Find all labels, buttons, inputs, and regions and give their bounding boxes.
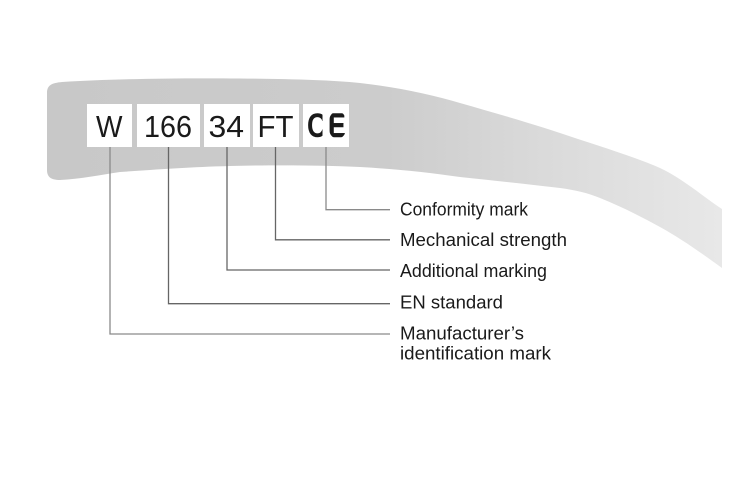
label: manufacturer's identification mark: identification mark [400, 344, 552, 364]
box: W [87, 104, 132, 147]
box: 166: 166 [144, 109, 192, 144]
box: CE conformity symbol: E [328, 107, 346, 145]
label: manufacturer's identification mark: Manufacturer’s [400, 324, 524, 344]
box: CE conformity symbol [303, 104, 349, 147]
leader: additional marking [227, 147, 390, 270]
label: manufacturer's identification mark [400, 324, 552, 364]
leader: EN standard [168, 147, 390, 304]
leader: conformity mark [326, 147, 390, 210]
label: additional marking: Additional marking [400, 261, 547, 281]
leader lines [110, 147, 390, 334]
box: 34: 34 [208, 109, 244, 144]
marking code boxes [87, 104, 349, 147]
leader labels [400, 200, 567, 364]
leader: manufacturer's identification mark [110, 147, 390, 334]
box: FT [253, 104, 299, 147]
diagram: marking on a safety glasses arm [47, 78, 722, 360]
label: mechanical strength: Mechanical strength [400, 230, 567, 250]
glasses arm [47, 78, 722, 268]
box: FT: FT [258, 109, 294, 144]
box: CE conformity symbol: C [307, 106, 327, 145]
box: W: W [96, 109, 123, 144]
label: conformity mark: Conformity mark [400, 200, 529, 220]
box: 166 [137, 104, 200, 147]
leader: mechanical strength [276, 147, 390, 240]
box: 34 [204, 104, 250, 147]
label: EN standard: EN standard [400, 292, 503, 312]
